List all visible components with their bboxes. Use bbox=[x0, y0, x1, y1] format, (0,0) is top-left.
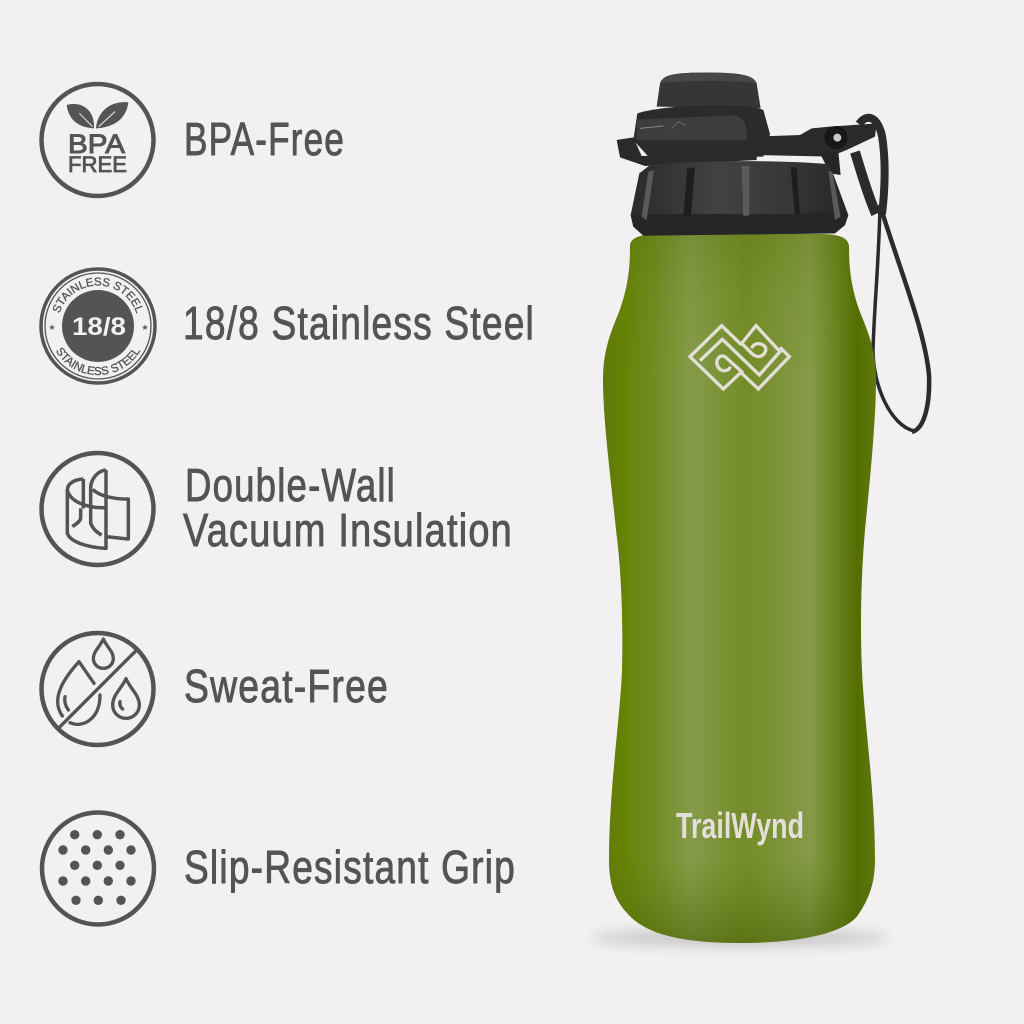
icon: slip resistant grip dots bbox=[42, 812, 154, 924]
label: Double-Wall Vacuum Insulation: Vacuum Insulation bbox=[183, 504, 513, 556]
curved text bottom: STAINLESS STEEL bbox=[56, 348, 140, 376]
collar bbox=[631, 161, 848, 236]
cap top bbox=[657, 73, 761, 108]
bottle bbox=[590, 73, 929, 944]
grip dots bbox=[58, 830, 136, 905]
icon: BPA free badge bbox=[42, 84, 154, 196]
ground shadow bbox=[590, 932, 890, 944]
wall panels bbox=[67, 470, 128, 548]
label: Double-Wall Vacuum Insulation: Double-Wall bbox=[185, 459, 396, 511]
BPA label: BPA bbox=[68, 129, 125, 159]
FREE label: FREE bbox=[68, 152, 127, 177]
label: BPA-Free: BPA-Free bbox=[184, 113, 345, 165]
icon: sweat free drops bbox=[42, 633, 154, 745]
brand name: TrailWynd bbox=[676, 805, 804, 846]
latch tab bbox=[617, 137, 757, 166]
stars: ★ bbox=[48, 323, 56, 332]
pin bbox=[824, 126, 848, 149]
logo mark bbox=[690, 326, 789, 389]
seal number: 18/8 bbox=[72, 313, 126, 341]
body shading bbox=[603, 234, 876, 943]
icon: leaves bbox=[67, 102, 128, 128]
bottle body bbox=[603, 234, 876, 943]
label: Double-Wall Vacuum Insulation bbox=[183, 459, 513, 556]
cap ring bbox=[633, 105, 770, 158]
drops and slash bbox=[58, 639, 139, 727]
label: Slip-Resistant Grip: Slip-Resistant Grip bbox=[184, 841, 516, 893]
stars: ★ bbox=[141, 323, 149, 332]
collar ribs bbox=[642, 170, 654, 220]
label: Sweat-Free: Sweat-Free bbox=[184, 660, 389, 712]
latch arm bbox=[755, 123, 877, 157]
hinge bracket bbox=[820, 152, 841, 175]
cap bbox=[617, 73, 877, 236]
label: 18/8 Stainless Steel: 18/8 Stainless Steel bbox=[183, 297, 535, 349]
curved text top: STAINLESS STEEL bbox=[52, 277, 142, 314]
icon: 18/8 stainless steel seal bbox=[39, 267, 157, 385]
icon: double wall insulation bbox=[42, 453, 154, 565]
strap loop bbox=[855, 118, 929, 432]
